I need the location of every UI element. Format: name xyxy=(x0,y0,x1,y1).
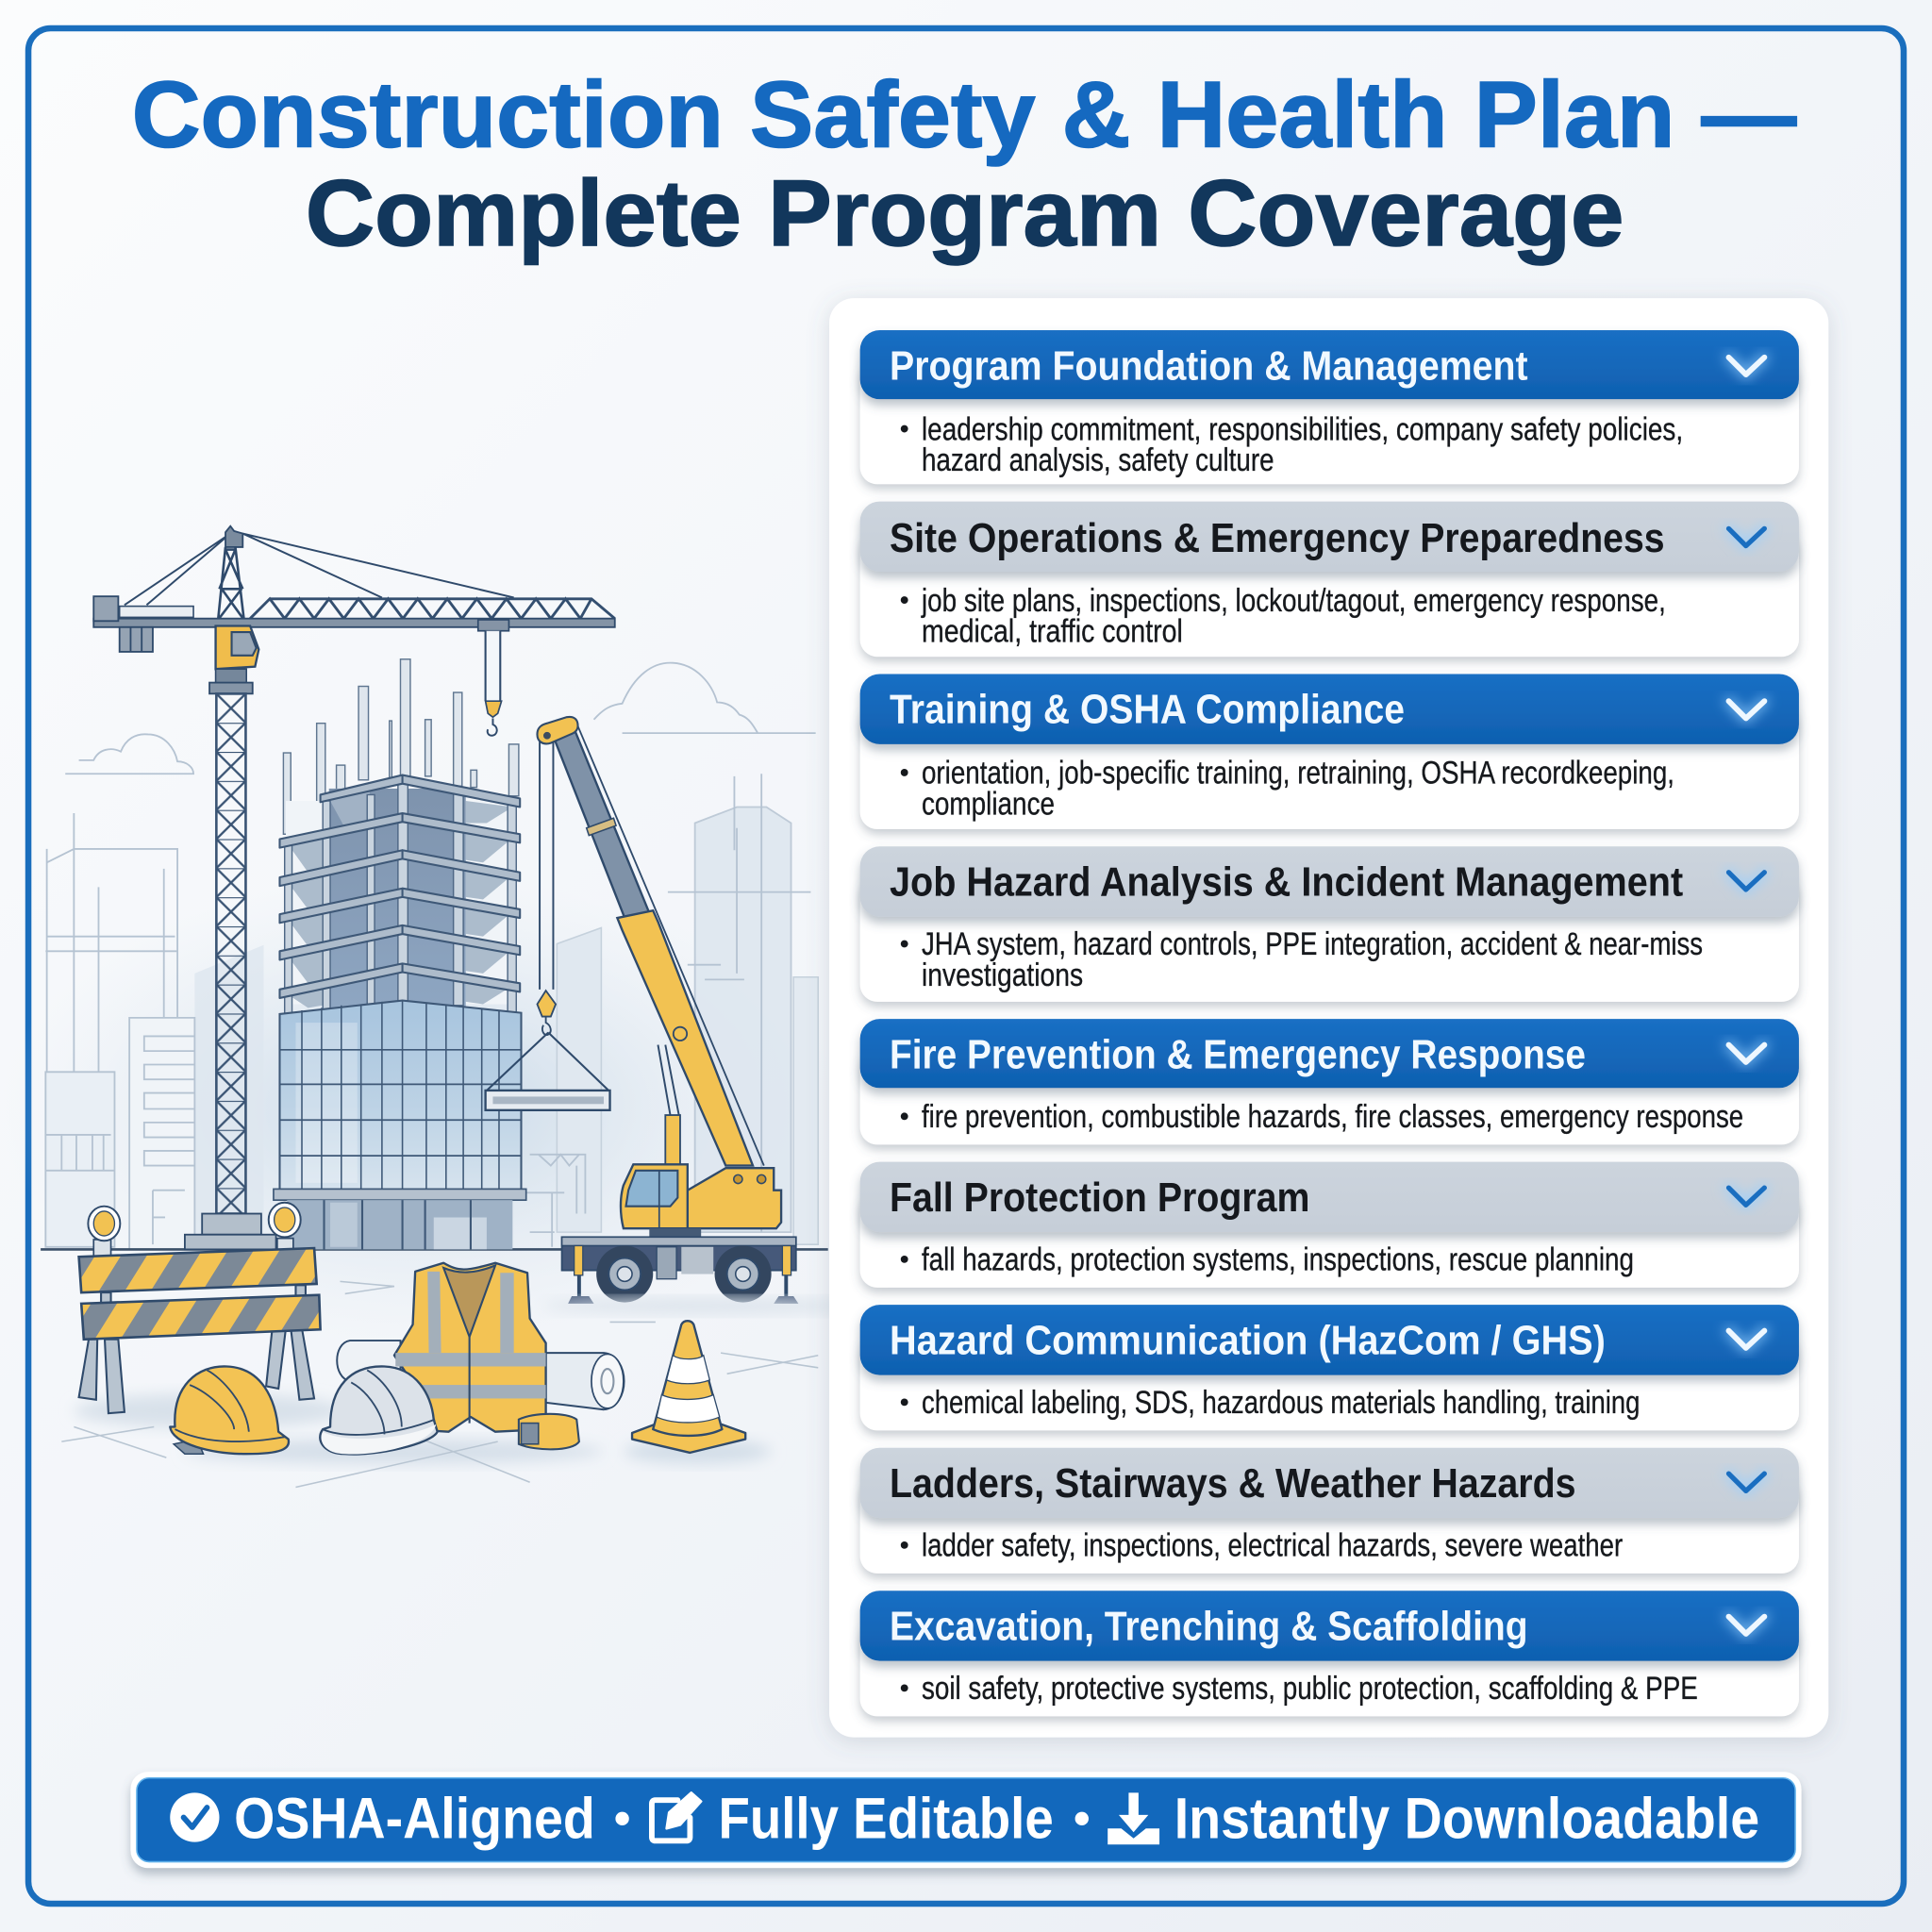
hydraulic arm xyxy=(658,1045,679,1115)
OSHA label: OSHA-Aligned xyxy=(234,1787,595,1852)
header text: Job Hazard Analysis & Incident Management xyxy=(890,860,1683,906)
header text: Ladders, Stairways & Weather Hazards xyxy=(890,1461,1576,1507)
body card xyxy=(860,530,1799,657)
header bar xyxy=(860,1591,1799,1661)
separator xyxy=(1075,1812,1089,1825)
bullet list xyxy=(901,411,1683,478)
barricade boards xyxy=(79,1248,317,1292)
header text: Site Operations & Emergency Preparedness xyxy=(890,516,1665,561)
chevron xyxy=(1728,1188,1764,1205)
outriggers xyxy=(568,1245,798,1304)
section: fire prevention xyxy=(860,1019,1799,1144)
chevron xyxy=(1728,873,1764,890)
header bar xyxy=(860,1448,1799,1518)
clouds xyxy=(65,663,816,774)
editable label: Fully Editable xyxy=(718,1787,1054,1852)
separator xyxy=(615,1812,629,1825)
ground markings and shadows xyxy=(61,1281,862,1487)
bullet list xyxy=(901,926,1703,993)
bullet list: investigations xyxy=(922,958,1083,993)
ground line xyxy=(41,1248,828,1250)
downloadable label: Instantly Downloadable xyxy=(1174,1787,1759,1852)
section: excavation xyxy=(860,1591,1799,1716)
boom collar xyxy=(587,818,616,836)
section: fall protection xyxy=(860,1162,1799,1288)
tower crane xyxy=(93,526,615,1249)
floor slab undersides xyxy=(290,791,512,1008)
bullet list xyxy=(901,756,1674,822)
wheels xyxy=(596,1245,772,1303)
load lines xyxy=(540,737,553,990)
jib truss xyxy=(250,599,615,619)
flange xyxy=(209,683,253,693)
tape measure xyxy=(519,1414,579,1449)
body card xyxy=(860,358,1799,484)
barricade lamps xyxy=(88,1203,301,1259)
bullet list: medical, traffic control xyxy=(922,613,1183,649)
safety vest xyxy=(394,1263,546,1432)
header text: Fire Prevention & Emergency Response xyxy=(890,1032,1586,1077)
body card xyxy=(860,1047,1799,1144)
chevron xyxy=(1728,358,1764,375)
icon: check circle xyxy=(170,1792,219,1842)
chevron xyxy=(1728,1617,1764,1634)
boom yellow section xyxy=(617,910,753,1166)
section: ladders and stairways xyxy=(860,1448,1799,1574)
body card xyxy=(860,1333,1799,1430)
header text: Training & OSHA Compliance xyxy=(890,688,1405,733)
header bar xyxy=(860,846,1799,917)
footer banner xyxy=(130,1772,1802,1868)
ground floor xyxy=(287,1200,512,1249)
chevron xyxy=(1728,528,1764,546)
building under construction xyxy=(274,659,526,1249)
barricade xyxy=(79,1203,321,1413)
rebar columns xyxy=(283,659,519,838)
slewing neck xyxy=(216,669,246,684)
chassis xyxy=(562,1237,796,1279)
white hard hat xyxy=(320,1366,438,1455)
crane cab xyxy=(621,1164,688,1228)
chevron xyxy=(1728,1045,1764,1062)
chevron xyxy=(1728,1331,1764,1348)
header bar xyxy=(860,1305,1799,1375)
walkway rail xyxy=(120,607,193,617)
title: Construction Safety & Health Plan — xyxy=(132,62,1797,167)
bullet list: leadership commitment, responsibilities, company safety policies, xyxy=(922,411,1683,447)
section: job hazard analysis xyxy=(860,846,1799,1002)
header text: Fall Protection Program xyxy=(890,1175,1309,1221)
crane turret xyxy=(688,1168,781,1228)
title xyxy=(132,62,1797,266)
bullet list: hazard analysis, safety culture xyxy=(922,442,1274,478)
body card xyxy=(860,702,1799,829)
bullet list: JHA system, hazard controls, PPE integration, accident & near-miss xyxy=(922,926,1703,962)
building interior xyxy=(286,801,514,1004)
floor slabs xyxy=(279,775,520,998)
bullet list: ladder safety, inspections, electrical hazards, severe weather xyxy=(922,1528,1623,1564)
header text: Hazard Communication (HazCom / GHS) xyxy=(890,1318,1606,1363)
header bar xyxy=(860,1019,1799,1088)
chevron xyxy=(1728,1474,1764,1491)
upper mast xyxy=(218,547,244,620)
bullet list: compliance xyxy=(922,786,1055,822)
header bar xyxy=(860,502,1799,572)
header bar xyxy=(860,674,1799,744)
icon: edit xyxy=(652,1792,701,1840)
boom grey section xyxy=(555,732,649,918)
chevron xyxy=(1728,701,1764,718)
section: program foundation xyxy=(860,330,1799,484)
header bar xyxy=(860,330,1799,399)
title: Complete Program Coverage xyxy=(306,161,1624,266)
body card xyxy=(860,1476,1799,1574)
jib beam xyxy=(93,619,615,627)
traffic cone xyxy=(632,1321,745,1453)
header text: Program Foundation & Management xyxy=(890,343,1528,389)
mast base xyxy=(185,1214,276,1249)
crane cables xyxy=(125,534,514,605)
bullet list xyxy=(901,583,1666,649)
bullet list: fall hazards, protection systems, inspections, rescue planning xyxy=(922,1242,1634,1278)
counterweight tower xyxy=(93,596,118,621)
columns xyxy=(285,778,516,1015)
bullet list: orientation, job-specific training, retraining, OSHA recordkeeping, xyxy=(922,756,1674,791)
glass tower xyxy=(279,1001,521,1191)
header bar xyxy=(860,1162,1799,1232)
boom tip xyxy=(537,717,578,743)
body card xyxy=(860,1619,1799,1716)
barricade legs xyxy=(79,1285,314,1413)
lattice mast xyxy=(216,693,245,1214)
bullet list: soil safety, protective systems, public protection, scaffolding & PPE xyxy=(922,1671,1698,1707)
section: hazard communication xyxy=(860,1305,1799,1430)
mobile crane xyxy=(486,717,798,1304)
section: site operations xyxy=(860,502,1799,657)
crane cab xyxy=(216,626,258,669)
section: training and OSHA xyxy=(860,674,1799,829)
bullet list: fire prevention, combustible hazards, fire classes, emergency response xyxy=(922,1099,1743,1135)
panel: program coverage xyxy=(829,298,1828,1738)
bullet list: chemical labeling, SDS, hazardous materials handling, training xyxy=(922,1385,1640,1421)
blueprint rolls xyxy=(337,1341,625,1409)
background city buildings xyxy=(45,774,818,1249)
hook block and sling xyxy=(486,991,610,1110)
back cable xyxy=(576,724,764,1166)
crane apex xyxy=(225,526,242,547)
bullet list: job site plans, inspections, lockout/tagout, emergency response, xyxy=(921,583,1666,619)
trolley and hook xyxy=(478,620,508,736)
illustration: construction site xyxy=(0,526,862,1487)
background haze xyxy=(0,874,838,1343)
counterweights xyxy=(120,627,153,652)
icon: download xyxy=(1108,1792,1159,1844)
body card xyxy=(860,874,1799,1002)
body card xyxy=(860,1191,1799,1288)
podium band xyxy=(274,1189,526,1200)
header text: Excavation, Trenching & Scaffolding xyxy=(890,1604,1528,1649)
yellow hard hat xyxy=(170,1366,289,1454)
